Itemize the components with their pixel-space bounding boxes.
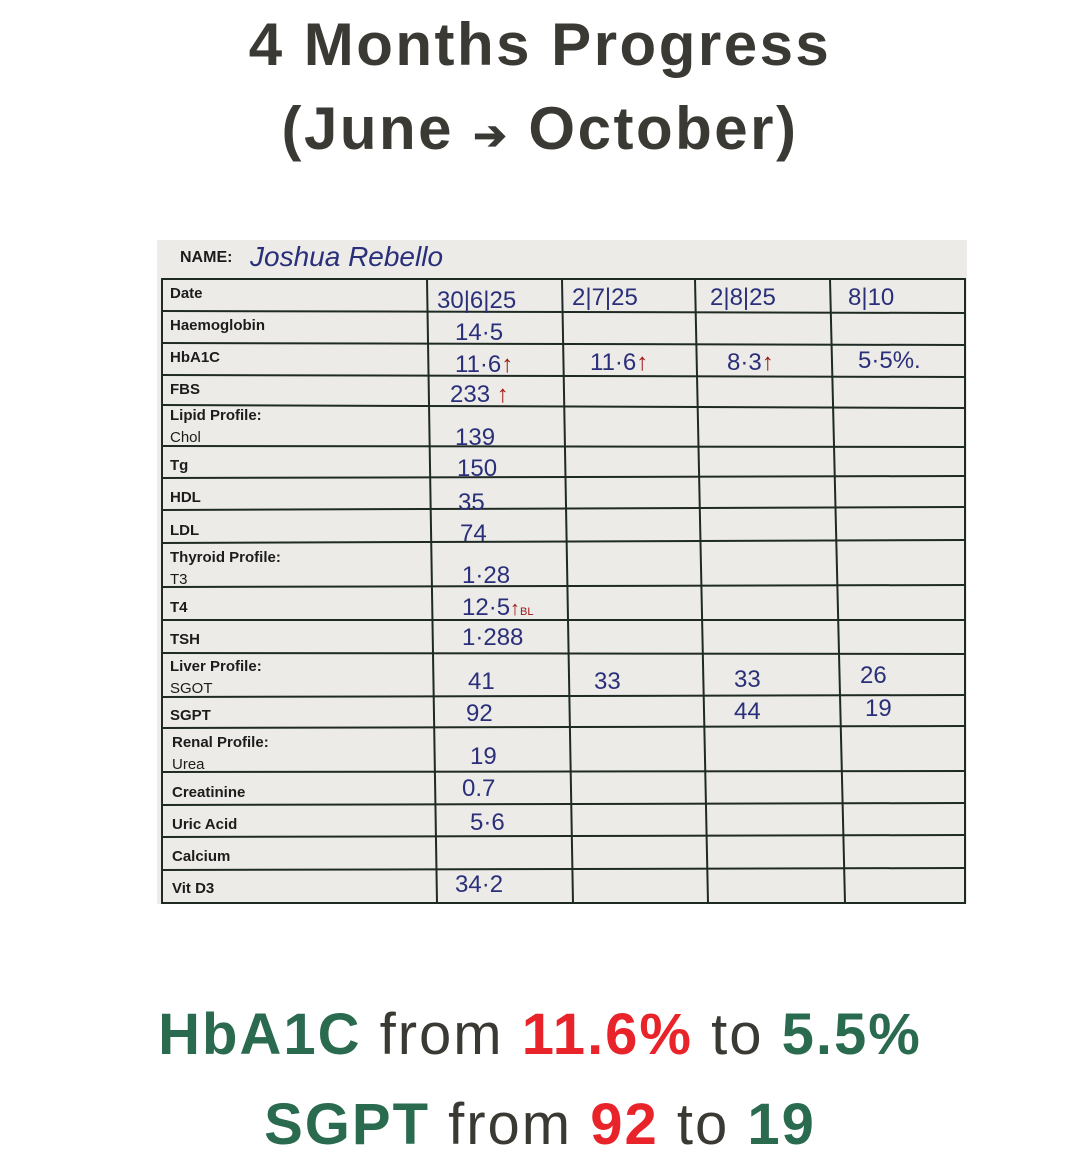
photo: lab report table	[157, 240, 967, 904]
row labels: Lipid Profile:	[170, 407, 262, 424]
row labels: Urea	[172, 756, 205, 773]
handwritten values: 33	[594, 668, 621, 695]
row labels: Creatinine	[172, 784, 245, 801]
handwritten values: 30|6|25	[437, 287, 516, 314]
handwritten values	[437, 284, 921, 898]
handwritten values: 12·5↑BL	[462, 594, 534, 621]
handwritten values: 41	[468, 668, 495, 695]
row labels: LDL	[170, 522, 199, 539]
row labels: Chol	[170, 429, 201, 446]
handwritten values: 74	[460, 520, 487, 547]
row labels: Calcium	[172, 848, 230, 865]
handwritten values: 139	[455, 424, 495, 451]
row labels: Uric Acid	[172, 816, 237, 833]
handwritten values: 11·6↑	[455, 351, 513, 378]
summary: HbA1C: HbA1C from 11.6% to 5.5%	[158, 1002, 922, 1067]
title: 4 Months Progress	[249, 11, 831, 78]
row labels: Vit D3	[172, 880, 214, 897]
row labels: TSH	[170, 631, 200, 648]
handwritten values: 35	[458, 489, 485, 516]
handwritten values: 33	[734, 666, 761, 693]
handwritten values: 5·5%.	[858, 347, 921, 374]
handwritten values: 1·288	[462, 624, 523, 651]
handwritten values: 8·3↑	[727, 349, 774, 376]
handwritten values: 92	[466, 700, 493, 727]
handwritten values: 11·6↑	[590, 349, 648, 376]
handwritten values: 19	[865, 695, 892, 722]
handwritten values: 8|10	[848, 284, 894, 311]
row labels	[170, 285, 281, 897]
row labels: Thyroid Profile:	[170, 549, 281, 566]
handwritten values: 2|7|25	[572, 284, 638, 311]
row labels: Haemoglobin	[170, 317, 265, 334]
handwritten values: 26	[860, 662, 887, 689]
handwritten values: 5·6	[470, 809, 505, 836]
handwritten values: 34·2	[455, 871, 503, 898]
row labels: HDL	[170, 489, 201, 506]
handwritten values: 1·28	[462, 562, 510, 589]
row labels: SGOT	[170, 680, 213, 697]
row labels: HbA1C	[170, 349, 220, 366]
handwritten values: 44	[734, 698, 761, 725]
handwritten values: 0.7	[462, 775, 495, 802]
row labels: FBS	[170, 381, 200, 398]
handwritten values: 233 ↑	[450, 381, 509, 408]
row labels: SGPT	[170, 707, 211, 724]
subtitle: (June ➔ October)	[282, 95, 798, 162]
row labels: Date	[170, 285, 203, 302]
row labels: T3	[170, 571, 188, 588]
handwritten values: 19	[470, 743, 497, 770]
summary: SGPT: SGPT from 92 to 19	[264, 1092, 816, 1157]
name: NAME:	[180, 249, 232, 266]
handwritten values: 2|8|25	[710, 284, 776, 311]
row labels: Liver Profile:	[170, 658, 262, 675]
row labels: Renal Profile:	[172, 734, 269, 751]
handwritten values: 150	[457, 455, 497, 482]
name: Joshua Rebello	[249, 241, 443, 272]
handwritten values: 14·5	[455, 319, 503, 346]
row labels: T4	[170, 599, 188, 616]
row labels: Tg	[170, 457, 188, 474]
